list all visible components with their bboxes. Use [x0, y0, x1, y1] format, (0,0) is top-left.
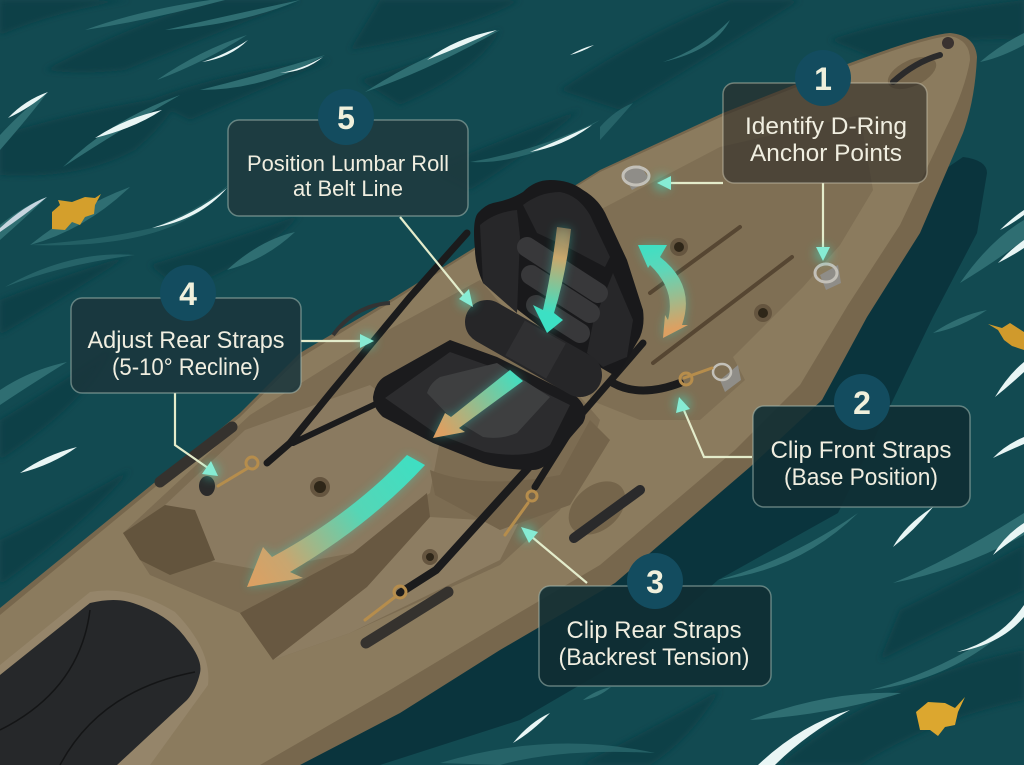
- panel 4: [71, 265, 301, 393]
- badge 5: 5: [337, 100, 355, 136]
- backrest: [474, 180, 644, 377]
- left footwell: [123, 505, 215, 575]
- seat cushion centre: [427, 363, 550, 438]
- hatch cover: [0, 600, 200, 765]
- badge 4: 4: [179, 276, 197, 312]
- text 5: Position Lumbar Roll: [247, 151, 449, 176]
- badge 3: [627, 553, 683, 609]
- centre floor: [165, 385, 440, 570]
- panel 1: [723, 50, 927, 183]
- scupper holes: [312, 240, 770, 563]
- text 2: (Base Position): [784, 464, 938, 491]
- kayak shadow: [300, 157, 987, 765]
- tie-down slot right: [366, 592, 448, 643]
- text 1: Anchor Points: [750, 140, 902, 167]
- text 3: Clip Rear Straps: [566, 617, 742, 644]
- direction arrows: [247, 227, 688, 587]
- lumbar roll: [487, 322, 580, 375]
- panel 2: [753, 374, 970, 507]
- leaf: bottom: [916, 697, 965, 736]
- backrest pads: [480, 192, 633, 367]
- connector lines: [175, 183, 823, 583]
- arrow: forward large: [247, 455, 425, 587]
- connector arrowheads: [202, 175, 831, 543]
- arrow glows: [247, 227, 688, 587]
- rear tank well: [590, 115, 873, 420]
- right footwell: [240, 493, 430, 660]
- straps and clips: [218, 233, 712, 620]
- text 1: [745, 113, 907, 167]
- badge 1: [795, 50, 851, 106]
- text 2: Clip Front Straps: [770, 437, 952, 464]
- text 2: [770, 437, 952, 491]
- text 3: (Backrest Tension): [558, 644, 750, 671]
- text 1: Identify D-Ring: [745, 113, 907, 140]
- badge 2: 2: [853, 385, 871, 421]
- hatch ring: [0, 591, 208, 765]
- wall shadow near seat: [430, 420, 610, 530]
- badge 1: 1: [814, 61, 832, 97]
- deck grooves: [650, 227, 792, 363]
- lower floor: [273, 500, 530, 660]
- badge 5: [318, 89, 374, 145]
- panel 5: [228, 89, 468, 216]
- seat: [373, 180, 644, 470]
- tie-down slot left: [160, 427, 232, 482]
- side handle front: [558, 471, 640, 545]
- seat cushion: [373, 340, 585, 470]
- arrow: backrest: [533, 227, 571, 333]
- badge 3: 3: [646, 564, 664, 600]
- arrow: recline: [638, 245, 688, 338]
- hatch seams: [0, 610, 195, 765]
- arrow: seat cushion: [433, 370, 523, 438]
- bow recess and handle: [883, 37, 954, 96]
- text 3: [558, 617, 750, 671]
- backrest rows: [527, 247, 598, 333]
- badge 4: [160, 265, 216, 321]
- text 5: at Belt Line: [293, 176, 403, 201]
- d-rings: [199, 165, 841, 496]
- seat cushion mesh: [385, 352, 570, 455]
- side handle rear: [333, 303, 390, 335]
- text 4: Adjust Rear Straps: [88, 327, 284, 354]
- cockpit floor: [123, 280, 600, 660]
- text 4: (5-10° Recline): [112, 354, 260, 381]
- panel 3: [539, 553, 771, 686]
- leaf: right: [988, 323, 1024, 350]
- badge 2: [834, 374, 890, 430]
- leaf: left: [52, 194, 101, 230]
- text 5: [247, 151, 449, 201]
- text 4: [88, 327, 284, 381]
